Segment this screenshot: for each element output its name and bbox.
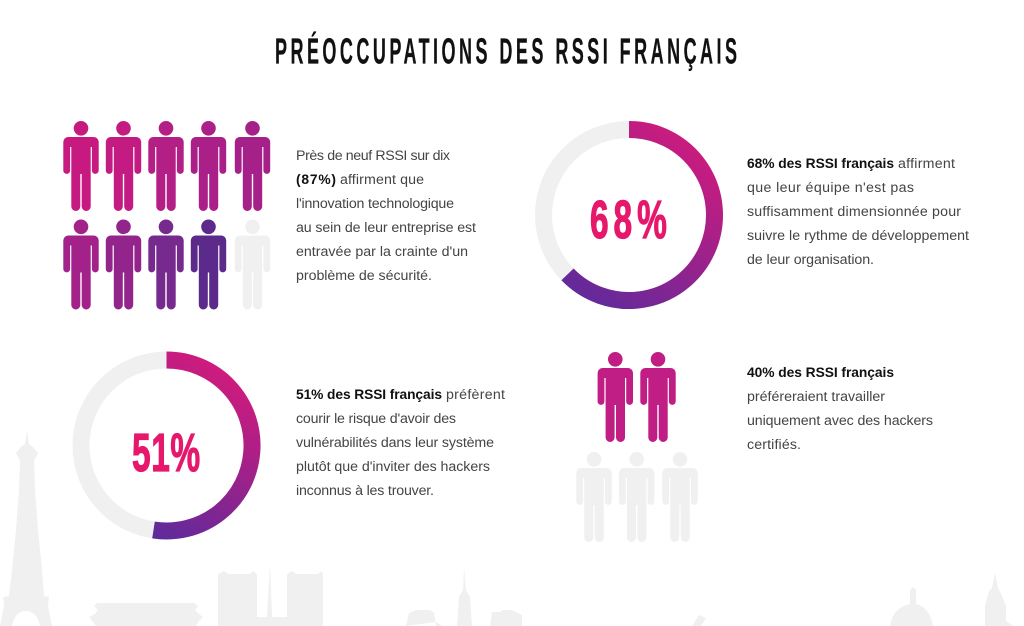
text: 51%: courir le risque d'avoir des bbox=[296, 411, 456, 427]
text: 87%: entravée par la crainte d'un bbox=[296, 244, 468, 260]
text: 51%: inconnus à les trouver. bbox=[296, 483, 434, 499]
donut chart: 51% bbox=[81, 360, 252, 531]
landmark: dome bbox=[890, 587, 933, 626]
value: 68%: 68% bbox=[590, 189, 667, 250]
landmark: diagonal monument bbox=[692, 615, 706, 626]
person 6 bbox=[63, 220, 99, 309]
person 7 bbox=[106, 220, 141, 309]
person inactive 2 bbox=[619, 452, 654, 542]
landmark: temple bbox=[89, 603, 203, 626]
text: 51%: préfèrent bbox=[446, 387, 505, 403]
text: 68%: suffisamment dimensionnée pour bbox=[747, 204, 961, 220]
landmark: central buildings bbox=[406, 568, 522, 626]
person 10 inactive bbox=[235, 220, 270, 309]
panel: 40% pictogram bbox=[576, 352, 698, 542]
text: 87%: affirment que bbox=[340, 172, 424, 188]
text: 40%: certifiés. bbox=[747, 437, 801, 453]
text: 40%: uniquement avec des hackers bbox=[747, 413, 933, 429]
text: 40%: préféreraient travailler bbox=[747, 389, 885, 405]
person inactive 1 bbox=[576, 452, 612, 542]
background: Paris skyline silhouette bbox=[0, 430, 1013, 626]
text: 87% bbox=[296, 148, 476, 284]
person active 2 bbox=[640, 352, 676, 442]
text: 68% bbox=[747, 156, 969, 268]
text: 68%: affirment bbox=[898, 156, 955, 172]
text: 87%: (87%) bbox=[296, 172, 336, 187]
text: 51%: vulnérabilités dans leur système bbox=[296, 435, 494, 451]
landmark: cathedral bbox=[218, 563, 323, 626]
person 4 bbox=[191, 121, 226, 211]
text: 87%: problème de sécurité. bbox=[296, 268, 432, 284]
person 3 bbox=[148, 121, 184, 211]
text: 40% bbox=[747, 365, 933, 453]
text: 68%: que leur équipe n'est pas bbox=[747, 180, 914, 196]
person active 1 bbox=[598, 352, 633, 442]
text: 51%: plutôt que d'inviter des hackers bbox=[296, 459, 490, 475]
title: PRÉOCCUPATIONS DES RSSI FRANÇAIS bbox=[275, 32, 737, 72]
text: 68%: de leur organisation. bbox=[747, 252, 874, 268]
person 1 bbox=[63, 121, 99, 211]
person inactive 3 bbox=[662, 452, 698, 542]
text: 51%: 51% des RSSI français bbox=[296, 387, 442, 402]
landmark: Eiffel tower bbox=[0, 430, 52, 626]
landmark: right tower bbox=[985, 573, 1013, 626]
panel: 87% pictogram bbox=[63, 121, 270, 309]
donut chart: 68% bbox=[544, 130, 714, 300]
text: 51% bbox=[296, 387, 505, 499]
person 8 bbox=[148, 220, 184, 309]
text: 40%: 40% des RSSI français bbox=[747, 365, 894, 380]
text: 87%: Près de neuf RSSI sur dix bbox=[296, 148, 450, 164]
text: 87%: au sein de leur entreprise est bbox=[296, 220, 476, 236]
person 2 bbox=[106, 121, 141, 211]
person 9 bbox=[191, 220, 226, 309]
text: 68%: 68% des RSSI français bbox=[747, 156, 894, 171]
value: 51%: 51% bbox=[132, 422, 200, 483]
text: 68%: suivre le rythme de développement bbox=[747, 228, 969, 244]
person 5 bbox=[235, 121, 270, 211]
text: 87%: l'innovation technologique bbox=[296, 196, 454, 212]
